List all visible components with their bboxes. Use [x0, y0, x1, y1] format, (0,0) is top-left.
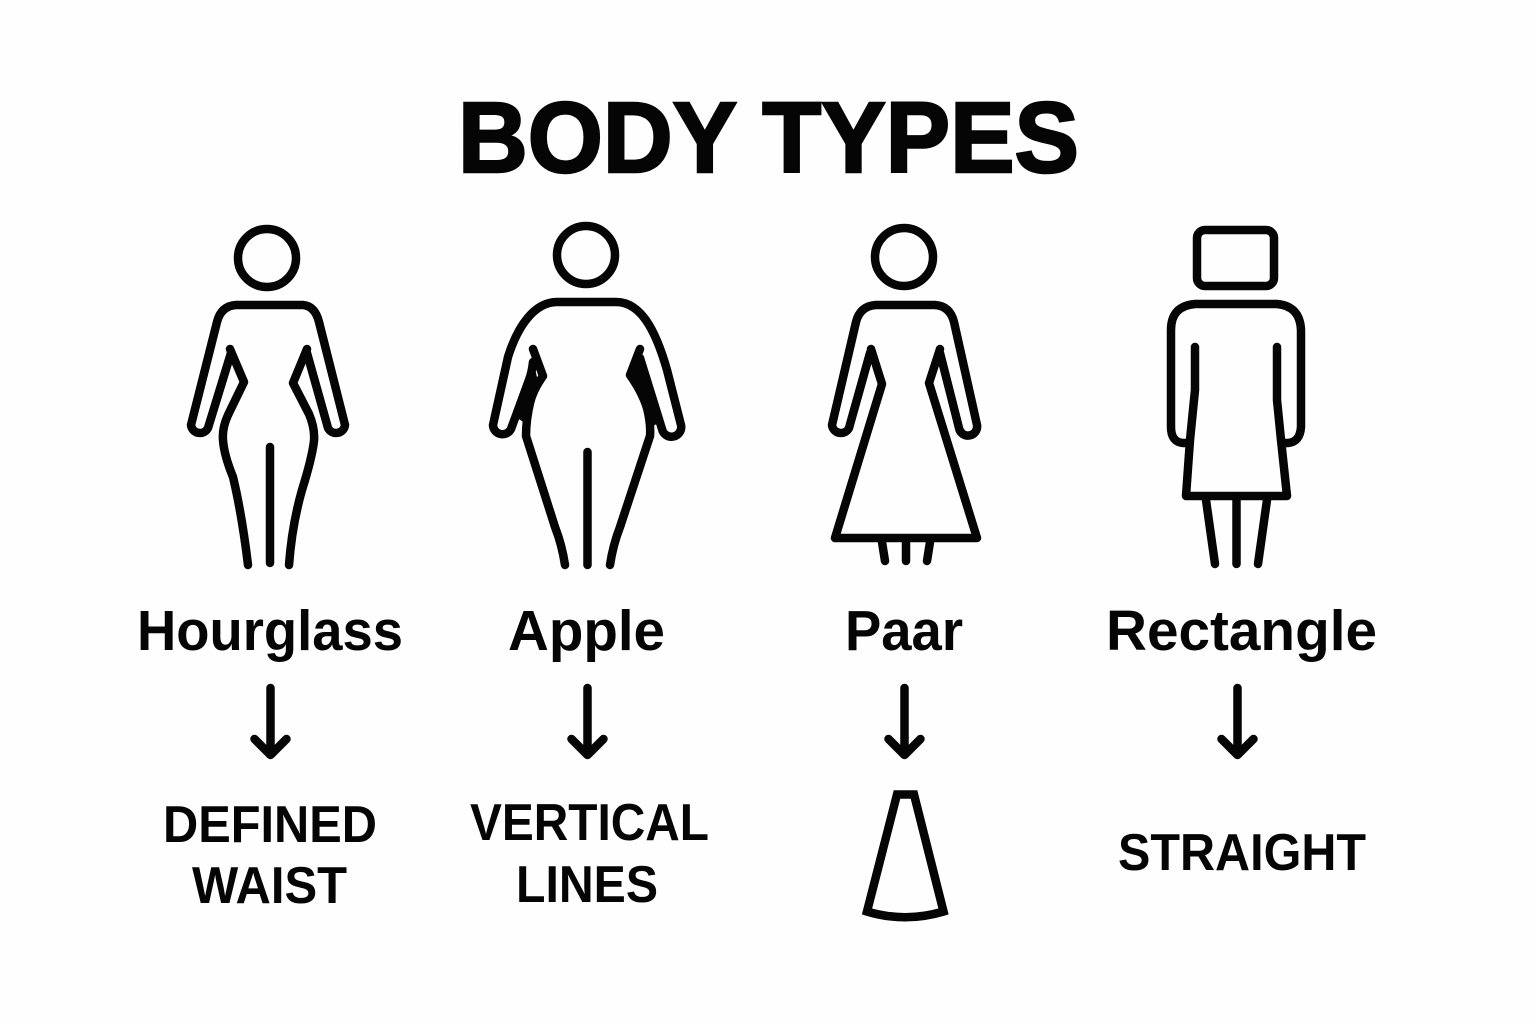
arrow: apple	[572, 688, 604, 755]
arrow: pear	[888, 688, 920, 755]
text: vertical lines: VERTICAL	[470, 794, 709, 852]
icon: rectangle figure	[1171, 230, 1301, 564]
text: defined waist	[163, 796, 377, 915]
text: vertical lines: LINES	[516, 856, 658, 914]
panel: rectangle column	[1106, 230, 1377, 882]
icon: apple figure	[493, 226, 681, 565]
icon: hourglass figure	[191, 229, 345, 565]
arrow: rectangle	[1222, 688, 1254, 755]
icon: pear figure	[832, 228, 977, 561]
panel: hourglass column	[137, 229, 403, 915]
text: vertical lines	[470, 794, 709, 914]
label: Apple: Apple	[508, 599, 665, 663]
icon detail: filled gap on left side	[520, 366, 536, 422]
icon detail: filled gap on right side	[630, 356, 657, 425]
title: BODY TYPES	[458, 82, 1079, 194]
arrow: hourglass	[254, 688, 286, 755]
label: Hourglass: Hourglass	[137, 599, 403, 663]
icon: A-line skirt	[867, 794, 944, 917]
panel: pear column	[832, 228, 977, 917]
panel: apple column	[470, 226, 709, 914]
text: straight: STRAIGHT	[1118, 824, 1366, 882]
text: defined waist: DEFINED	[163, 796, 377, 854]
text: defined waist: WAIST	[192, 857, 347, 915]
label: Paar: Paar	[845, 599, 963, 663]
label: Rectangle: Rectangle	[1106, 599, 1377, 663]
